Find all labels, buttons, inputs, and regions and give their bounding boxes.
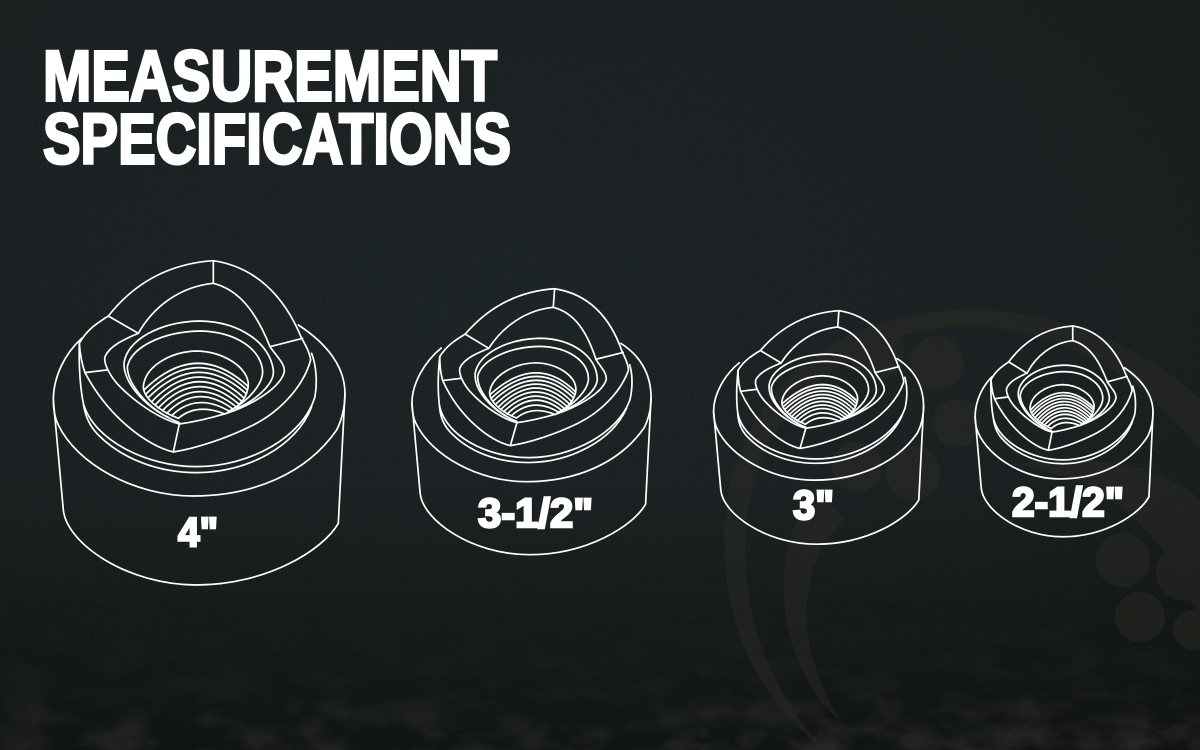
socket 4 inch (53, 261, 345, 585)
label 2-1/2 inch: 2-1/2" (1012, 479, 1124, 525)
label 4 inch: 4" (178, 509, 218, 555)
background (0, 207, 1200, 750)
socket 3 inch (714, 311, 924, 544)
watermark logo (724, 310, 1200, 750)
socket 3-1/2 inch (412, 289, 651, 555)
title (43, 38, 511, 180)
title line 2: SPECIFICATIONS (43, 100, 511, 180)
label 3-1/2 inch: 3-1/2" (478, 490, 593, 536)
title line 1: MEASUREMENT (43, 38, 497, 116)
label 3 inch: 3" (793, 482, 834, 528)
socket 2-1/2 inch (975, 326, 1153, 537)
